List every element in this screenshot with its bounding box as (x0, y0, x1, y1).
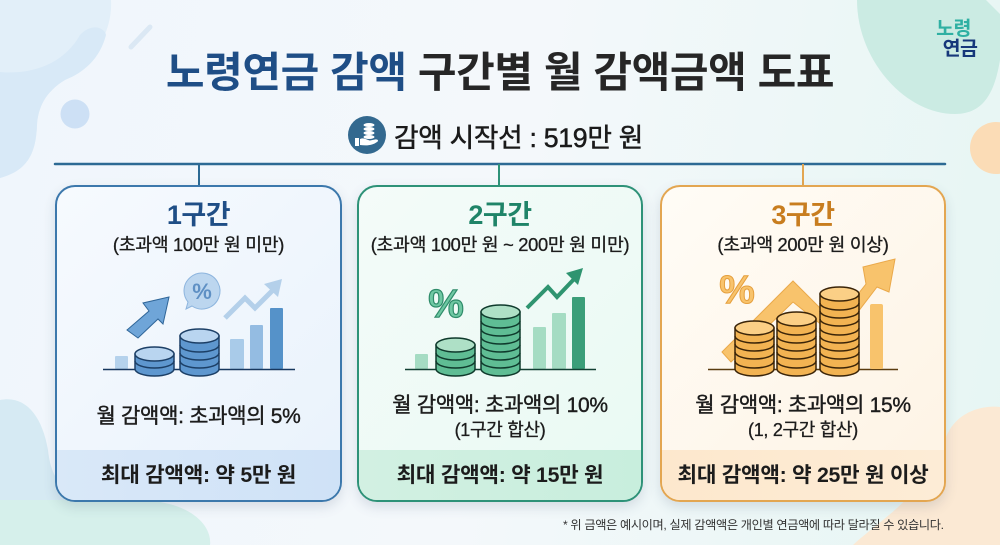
range: tier 1: (초과액 100만 원 미만) (113, 234, 284, 255)
footer: tier 1 maximum (57, 450, 340, 500)
footer: tier 3 maximum: 최대 감액액: 약 25만 원 이상 (678, 463, 928, 487)
footer: tier 2 maximum (359, 450, 641, 500)
footer: tier 1 maximum: 최대 감액액: 약 5만 원 (101, 463, 296, 487)
heading: tier 1: 1구간 (167, 200, 230, 230)
monthly reduction: tier 2: 월 감액액: 초과액의 10% (392, 394, 608, 417)
note: tier 2: (1구간 합산) (455, 420, 545, 440)
icon: hand with coins (348, 116, 386, 154)
panel: tier 1 (55, 185, 342, 502)
heading: tier 2: 2구간 (468, 200, 532, 230)
logo: 노령 (936, 18, 971, 40)
monthly reduction: tier 3: 월 감액액: 초과액의 15% (695, 394, 911, 417)
title: 노령연금 감액 구간별 월 감액금액 도표 (166, 49, 834, 96)
footer: tier 3 maximum (662, 450, 944, 500)
footer: tier 2 maximum: 최대 감액액: 약 15만 원 (397, 463, 603, 487)
panel: tier 2 (357, 185, 643, 502)
threshold label: 감액 시작선 : 519만 원 (394, 123, 643, 153)
illustration: tier 1: % (192, 279, 212, 304)
footnote: * 위 금액은 예시이며, 실제 감액액은 개인별 연금액에 따라 달라질 수 있습니다. (563, 518, 944, 532)
panel: tier 3 (660, 185, 946, 502)
logo (936, 18, 978, 60)
monthly reduction: tier 1: 월 감액액: 초과액의 5% (96, 405, 301, 428)
illustration: tier 3: % (719, 268, 755, 312)
logo: 연금 (943, 38, 977, 60)
range: tier 3: (초과액 200만 원 이상) (717, 234, 889, 255)
illustration: tier 2: % (428, 282, 464, 326)
range: tier 2: (초과액 100만 원 ~ 200만 원 미만) (371, 234, 629, 255)
note: tier 3: (1, 2구간 합산) (748, 420, 858, 440)
heading: tier 3: 3구간 (771, 200, 835, 230)
